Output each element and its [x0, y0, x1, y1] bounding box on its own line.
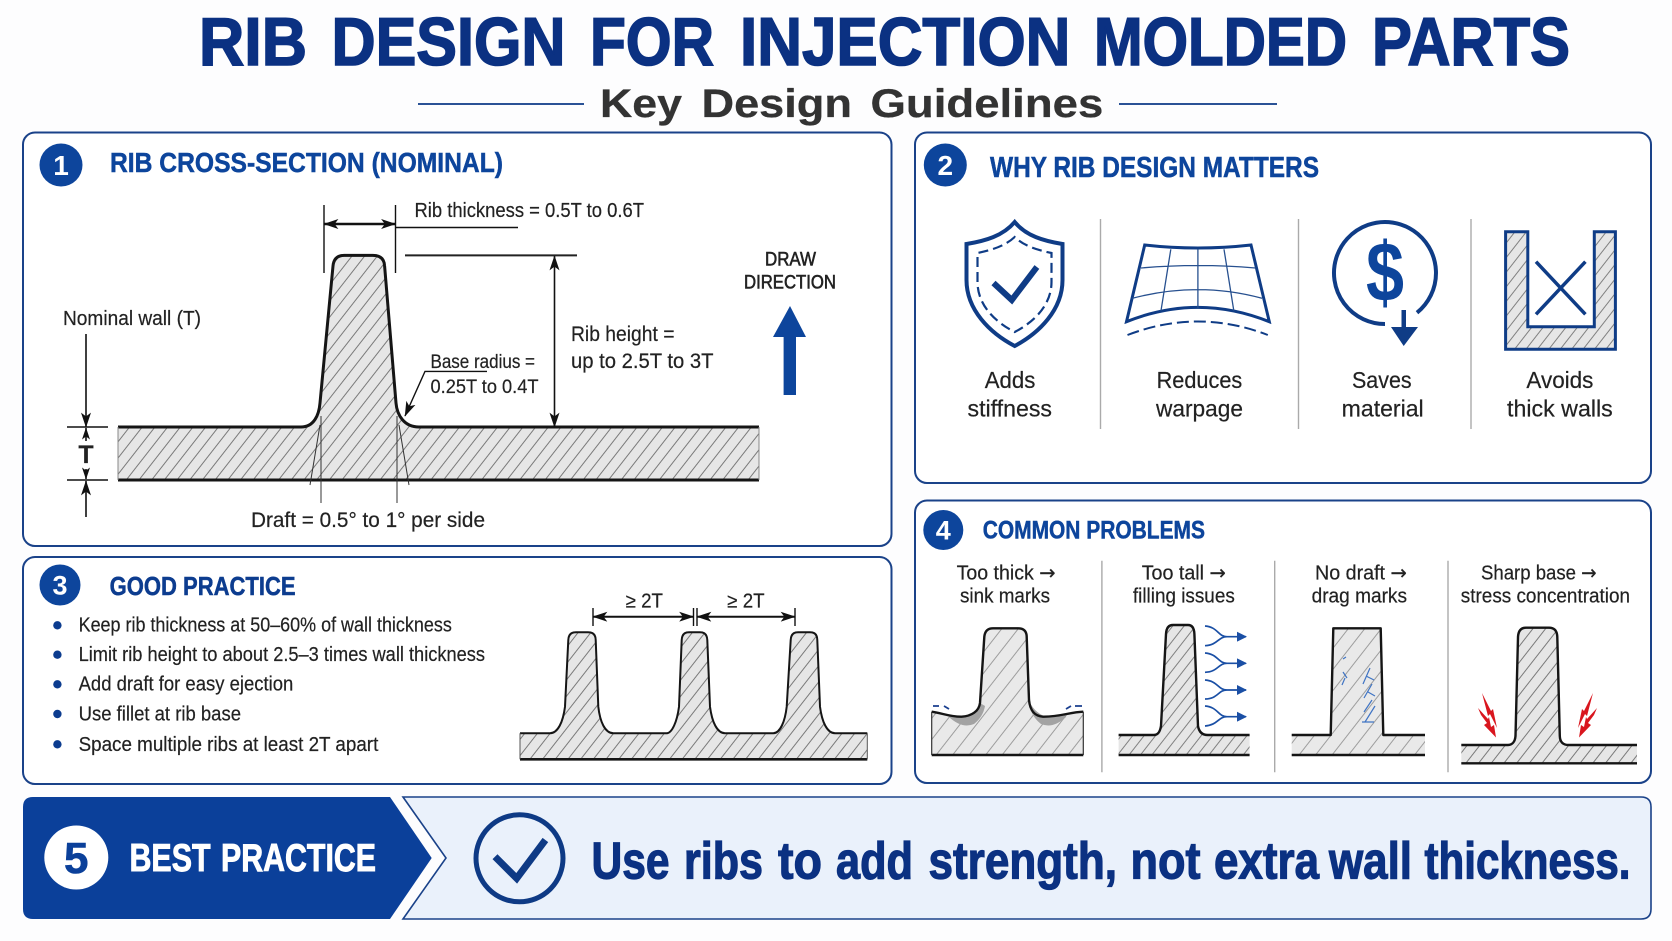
- problem: sharp base: stress concentration: [1461, 586, 1630, 608]
- problem: too tall: Too tall →: [1142, 560, 1226, 584]
- subtitle: Guidelines: [870, 82, 1103, 126]
- banner message text: not: [1130, 832, 1200, 890]
- item: reduces warpage: Reduces: [1157, 367, 1242, 393]
- bullet list: Add draft for easy ejection: [79, 673, 293, 695]
- dimension: nominal wall: T: [78, 441, 94, 469]
- title: RIB: [199, 4, 307, 80]
- title: PARTS: [1372, 4, 1570, 80]
- diagram: multiple ribs with spacing: [520, 590, 867, 759]
- problem: no draft: [1292, 560, 1425, 755]
- title: [199, 4, 1570, 80]
- problem: no draft: No draft →: [1315, 560, 1407, 584]
- icon: shield: [966, 222, 1062, 346]
- icon: dollar with down arrow: $: [1366, 225, 1404, 319]
- item: adds stiffness: Adds: [985, 367, 1035, 393]
- dimension: draft: Draft = 0.5° to 1° per side: [251, 509, 485, 532]
- title: MOLDED: [1094, 4, 1347, 80]
- banner message text: strength,: [928, 832, 1117, 890]
- banner label block: PRACTICE: [221, 837, 376, 880]
- icon: dollar with down arrow: [1334, 222, 1436, 346]
- item: saves material: [1334, 222, 1436, 422]
- panel: why rib design matters: [915, 132, 1651, 483]
- dimension: rib thickness: Rib thickness = 0.5T to 0.6T: [414, 200, 644, 222]
- banner message text: add: [836, 832, 913, 890]
- badge 1: 1: [53, 150, 69, 181]
- item: avoids thick walls: [1506, 232, 1615, 422]
- badge 4: [923, 510, 963, 550]
- diagram: multiple ribs with spacing: ≥ 2T: [626, 590, 663, 612]
- banner label block: 5: [64, 834, 89, 883]
- badge 3: 3: [52, 570, 68, 600]
- icon: check circle: [476, 815, 563, 902]
- heading: common problems: COMMON PROBLEMS: [983, 516, 1205, 544]
- bullet list: Use fillet at rib base: [79, 703, 241, 725]
- dimension: nominal wall: Nominal wall (T): [63, 308, 201, 330]
- rib profile drawing: [118, 255, 759, 480]
- item: reduces warpage: warpage: [1155, 396, 1243, 422]
- dimension: rib height: up to 2.5T to 3T: [571, 350, 714, 373]
- banner message text: extra: [1214, 832, 1320, 890]
- bullet list: [53, 615, 485, 756]
- banner message block: [403, 797, 1651, 919]
- banner: best practice: [23, 797, 1651, 919]
- item: saves material: Saves: [1352, 367, 1412, 393]
- item: adds stiffness: stiffness: [968, 396, 1052, 422]
- banner message text: ribs: [684, 832, 763, 890]
- item: avoids thick walls: Avoids: [1526, 367, 1593, 393]
- draw direction arrow: DIRECTION: [744, 273, 836, 294]
- banner message text: wall: [1328, 832, 1412, 890]
- dimension: rib height: [405, 255, 714, 427]
- item: avoids thick walls: thick walls: [1507, 396, 1613, 422]
- dimension: draft: [251, 416, 485, 532]
- item: saves material: material: [1342, 396, 1424, 422]
- problem: too thick: Too thick →: [957, 560, 1056, 584]
- badge 3: [40, 564, 80, 606]
- subtitle: [418, 82, 1277, 126]
- problem: sharp base: [1461, 560, 1637, 763]
- bullet list: Space multiple ribs at least 2T apart: [79, 734, 379, 756]
- draw direction arrow: [744, 249, 836, 395]
- bullet list: Keep rib thickness at 50–60% of wall thickness: [79, 615, 452, 637]
- item: reduces warpage: [1126, 245, 1269, 422]
- heading: rib cross-section: RIB CROSS-SECTION (NOMINAL): [110, 147, 503, 178]
- badge 4: 4: [936, 516, 951, 546]
- banner label block: [23, 797, 432, 919]
- title: DESIGN: [332, 4, 566, 80]
- problem: sharp base: Sharp base →: [1481, 560, 1597, 584]
- problem: too tall: filling issues: [1133, 586, 1235, 608]
- banner message text: [592, 832, 1630, 890]
- heading: good practice: GOOD PRACTICE: [110, 571, 296, 601]
- subtitle: Key: [600, 82, 683, 126]
- bullet list: Limit rib height to about 2.5–3 times wall thickness: [79, 644, 485, 666]
- title: FOR: [590, 4, 714, 80]
- diagram: multiple ribs with spacing: ≥ 2T: [727, 590, 765, 612]
- icon: red stress bolts: [1478, 693, 1597, 738]
- problem: too thick: [932, 560, 1083, 755]
- dimension: rib height: Rib height =: [571, 323, 674, 346]
- heading: why rib design matters: WHY RIB DESIGN MATTERS: [990, 152, 1319, 184]
- icon: flow arrows: [1205, 626, 1246, 726]
- problem: too thick: sink marks: [960, 586, 1050, 608]
- callout: base radius: Base radius =: [430, 352, 535, 373]
- dimension: rib thickness: [324, 200, 644, 273]
- badge 2: 2: [938, 150, 953, 181]
- banner message text: thickness.: [1424, 832, 1630, 890]
- item: adds stiffness: [966, 222, 1062, 422]
- badge 2: [924, 144, 967, 186]
- banner message text: to: [778, 832, 822, 890]
- badge 1: [40, 144, 82, 186]
- dimension: nominal wall: [63, 308, 201, 517]
- panel: rib cross-section: [23, 132, 892, 546]
- panel: common problems: [915, 500, 1651, 783]
- icon: thick U wall with X: [1506, 232, 1615, 349]
- draw direction arrow: DRAW: [765, 249, 816, 270]
- problem: too tall: [1119, 560, 1250, 755]
- problem: no draft: drag marks: [1312, 586, 1407, 608]
- banner message text: Use: [592, 832, 670, 890]
- callout: base radius: [405, 352, 539, 416]
- icon: warped grid: [1126, 245, 1269, 335]
- banner label block: BEST: [130, 837, 211, 880]
- title: INJECTION: [740, 4, 1070, 80]
- callout: base radius: 0.25T to 0.4T: [430, 377, 539, 398]
- subtitle: Design: [702, 82, 852, 126]
- panel: good practice: [23, 557, 892, 784]
